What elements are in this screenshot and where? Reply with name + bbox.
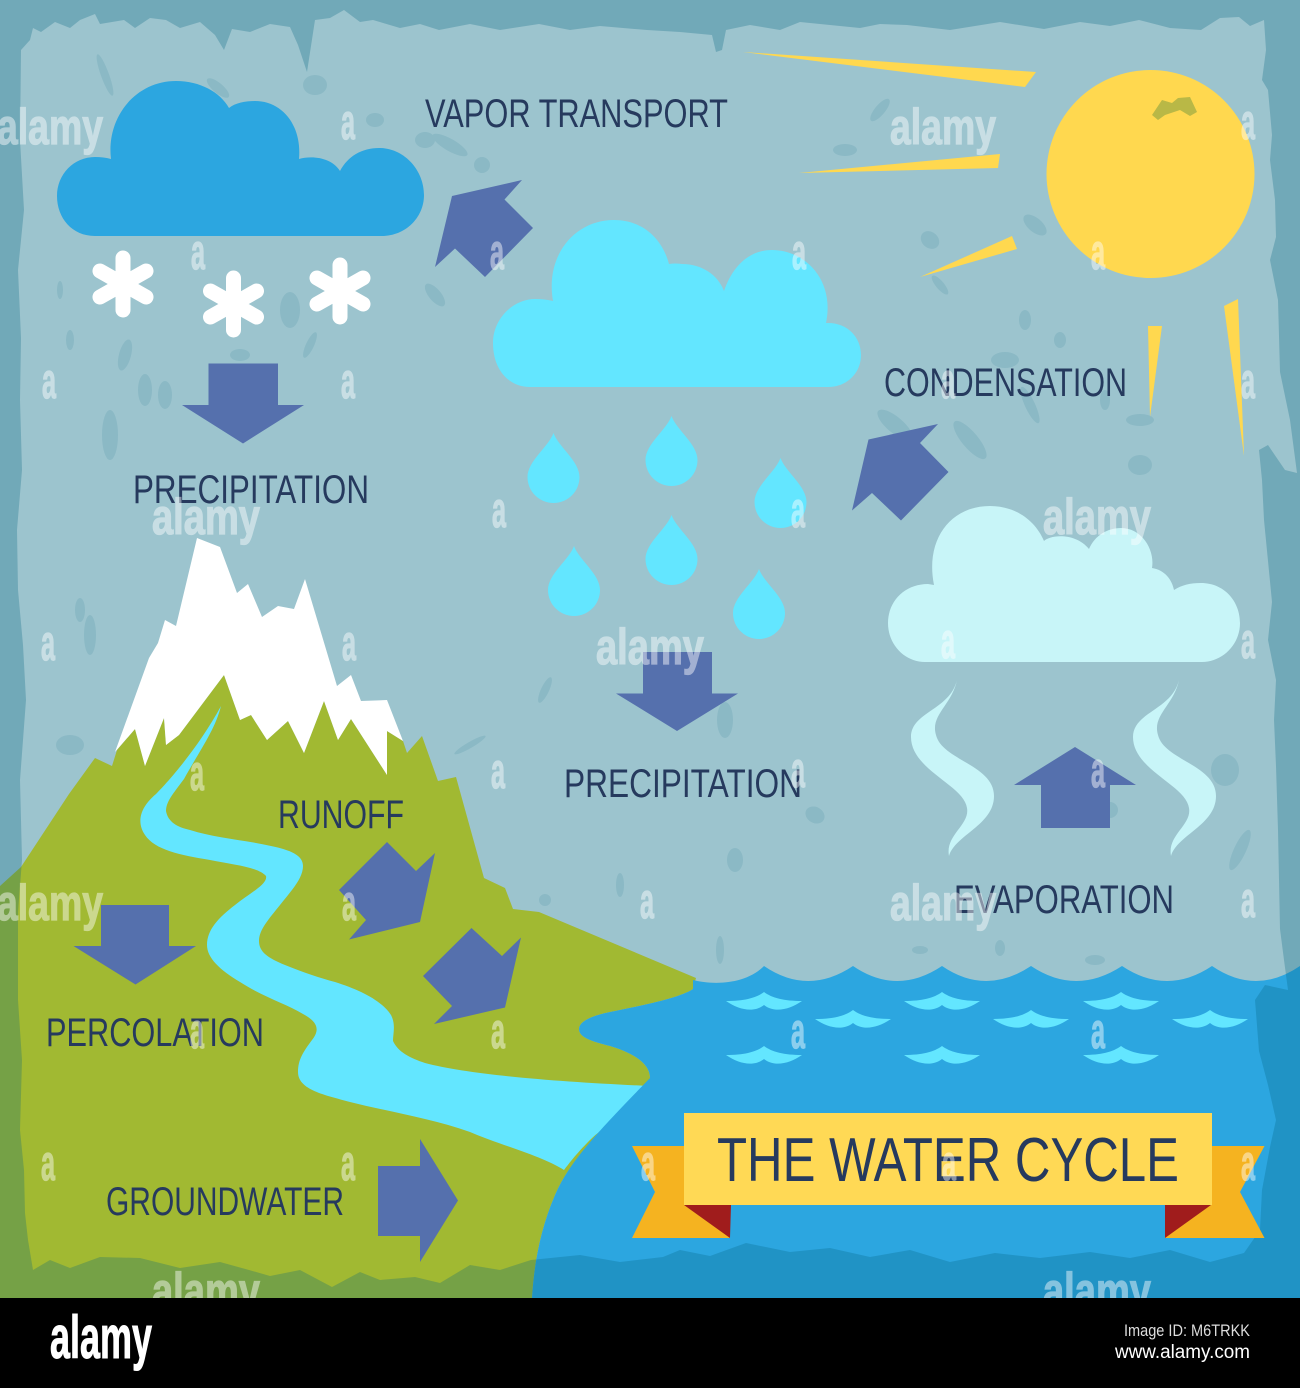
- watermarks: a: [792, 224, 807, 280]
- grunge blots: [56, 53, 1255, 965]
- watermarks: a: [791, 742, 806, 798]
- watermarks: a: [1091, 742, 1106, 798]
- watermarks: a: [492, 482, 507, 538]
- footer logo: alamy: [50, 1304, 152, 1371]
- footer image id: Image ID: M6TRKK: [1124, 1321, 1251, 1340]
- footer bar: [0, 1298, 1300, 1388]
- label: percolation: PERCOLATION: [46, 1011, 264, 1055]
- steam left: [911, 680, 994, 856]
- watermarks: alamy: [152, 1263, 260, 1319]
- watermarks: a: [641, 1135, 656, 1191]
- arrow: percolation: [74, 905, 196, 984]
- sea waves: [726, 992, 1248, 1064]
- sea: [532, 966, 1300, 1298]
- watermarks: a: [1241, 353, 1256, 409]
- watermarks: a: [342, 615, 357, 671]
- pale cloud: [888, 506, 1240, 662]
- watermarks: a: [1241, 94, 1256, 150]
- watermarks: a: [941, 353, 956, 409]
- arrow: runoff upper: [339, 842, 435, 940]
- footer url: www.alamy.com: [1114, 1342, 1250, 1363]
- label: condensation: CONDENSATION: [884, 361, 1127, 405]
- sun rays: [743, 52, 1244, 456]
- label: vapor transport: VAPOR TRANSPORT: [425, 92, 728, 136]
- watermarks: alamy: [0, 875, 103, 931]
- watermarks: alamy: [890, 99, 996, 155]
- watermarks: a: [1241, 613, 1256, 669]
- steam right: [1133, 680, 1216, 856]
- title ribbon: [632, 1113, 1264, 1238]
- arrow: runoff lower: [423, 928, 521, 1024]
- snowflakes: [100, 258, 363, 330]
- title: THE WATER CYCLE: [717, 1126, 1179, 1195]
- arrow: groundwater: [378, 1139, 458, 1262]
- watermarks: a: [941, 613, 956, 669]
- arrow: down precipitation centre: [616, 652, 738, 731]
- watermarks: alamy: [1043, 1263, 1151, 1319]
- label: groundwater: GROUNDWATER: [106, 1180, 344, 1224]
- watermarks: a: [341, 94, 356, 150]
- arrow: vapor transport: [435, 180, 533, 277]
- watermarks: a: [491, 1003, 506, 1059]
- dark cloud: [57, 81, 424, 236]
- label: evaporation: EVAPORATION: [954, 878, 1174, 922]
- watermarks: a: [791, 482, 806, 538]
- watermarks: a: [190, 1003, 205, 1059]
- watermarks: a: [491, 743, 506, 799]
- watermarks: a: [1091, 1003, 1106, 1059]
- label: precipitation left: PRECIPITATION: [133, 468, 369, 512]
- watermarks: a: [1241, 872, 1256, 928]
- land with mountain: [0, 675, 696, 1298]
- arrow: evaporation: [1014, 747, 1136, 828]
- watermarks: alamy: [596, 619, 704, 675]
- light cyan rain cloud: [493, 220, 861, 387]
- watermarks: a: [341, 1135, 356, 1191]
- watermarks: a: [42, 353, 57, 409]
- snow cap: [115, 538, 403, 775]
- watermarks: a: [41, 615, 56, 671]
- watermarks: alamy: [1043, 489, 1151, 545]
- watermarks: a: [1241, 1135, 1256, 1191]
- arrow: condensation: [852, 424, 948, 520]
- arrow: down precipitation left: [182, 364, 304, 444]
- watermarks: alamy: [152, 489, 260, 545]
- watermarks: a: [791, 1003, 806, 1059]
- label: precipitation centre: PRECIPITATION: [564, 762, 802, 806]
- watermarks: alamy: [890, 875, 996, 931]
- watermarks: a: [41, 1135, 56, 1191]
- watermarks: a: [1091, 224, 1106, 280]
- river: [140, 706, 650, 1170]
- watermarks: alamy: [0, 99, 103, 155]
- watermarks: a: [190, 745, 205, 801]
- watermarks: a: [191, 224, 206, 280]
- watermarks: a: [342, 875, 357, 931]
- watermarks: a: [942, 1135, 957, 1191]
- watermarks: a: [490, 224, 505, 280]
- watermarks: a: [640, 873, 655, 929]
- watermarks: a: [341, 353, 356, 409]
- label: runoff: RUNOFF: [278, 793, 404, 837]
- sun: [1046, 70, 1254, 278]
- rain drops: [528, 416, 806, 639]
